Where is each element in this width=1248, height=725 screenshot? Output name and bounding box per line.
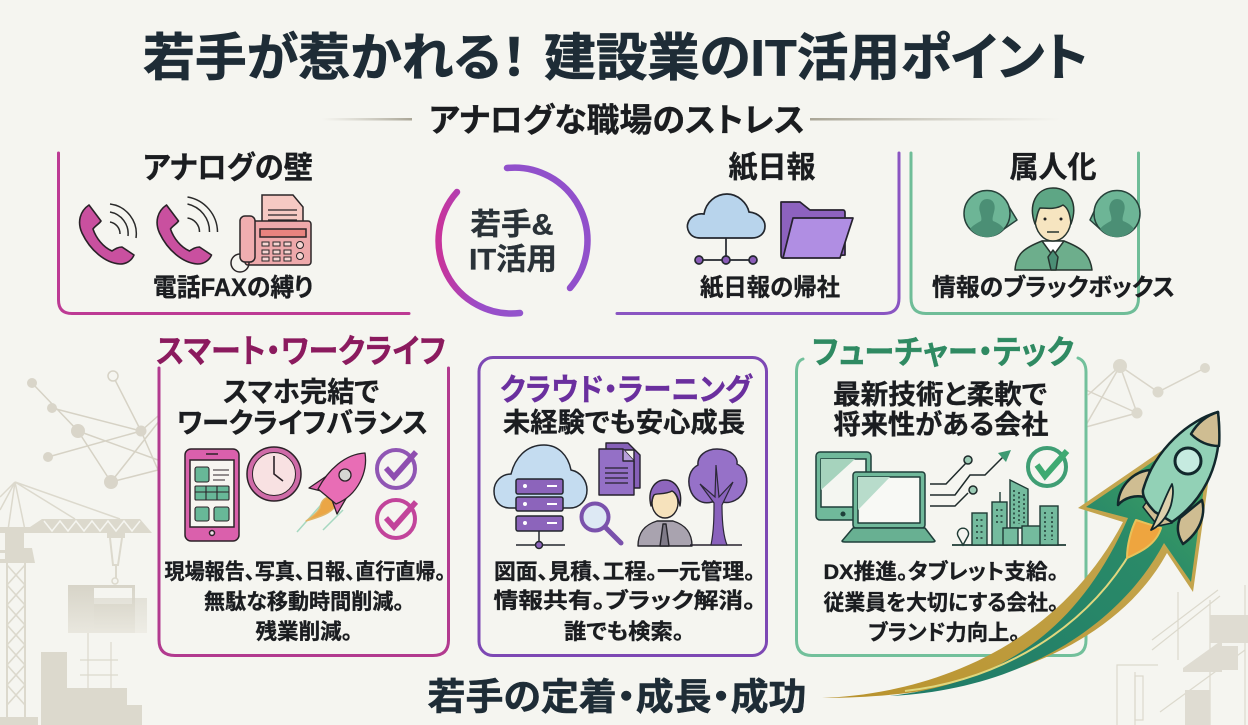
icon: cloud server — [494, 445, 587, 548]
panel: smart work life — [156, 332, 448, 656]
icon: purple check — [377, 450, 416, 488]
icon: folder — [781, 202, 853, 258]
section heading: analog workplace stress: アナログな職場のストレス — [429, 102, 805, 138]
heading: future tech: フューチャー・テック — [812, 334, 1074, 370]
subheading: safe growth: 未経験でも安心成長 — [503, 408, 745, 438]
label: returning to office: 紙日報の帰社 — [700, 274, 840, 302]
panel: knowledge silo — [911, 152, 1175, 314]
icon: fax machine — [231, 195, 311, 272]
title: 建設業のIT活用ポイント — [544, 30, 1088, 86]
icon: cloud network — [687, 194, 765, 264]
title: 若手が惹かれる！ — [143, 30, 527, 86]
body text: DX推進。タブレット支給。 — [824, 559, 1058, 584]
icon: laptop — [842, 472, 935, 542]
central ring: youth and IT — [439, 168, 587, 313]
body text: 現場報告、写真、日報、直行直帰。 — [164, 560, 446, 584]
label: phone and fax: 電話FAXの縛り — [153, 274, 313, 302]
icon: green check — [1028, 448, 1067, 486]
panel: analog wall — [58, 150, 409, 314]
panel: smart work life: 無駄な移動時間削減。 — [204, 590, 404, 614]
subheading: modern and flexible: 最新技術と柔軟で — [833, 380, 1047, 410]
icon: rocket — [297, 453, 366, 532]
panel: future tech: ブランド力向上。 — [868, 620, 1020, 645]
panel: cloud learning — [479, 358, 766, 656]
icon: businessman — [1015, 188, 1092, 270]
icon: clock — [247, 447, 301, 501]
icon: tablet — [816, 452, 871, 520]
panel: future tech — [796, 334, 1086, 656]
central ring: youth and IT: 若手& — [470, 208, 554, 242]
growth arrow with rocket — [822, 412, 1219, 698]
panel: future tech: 従業員を大切にする会社。 — [824, 591, 1058, 615]
background: network right — [1086, 359, 1210, 427]
icon: telephone 2 — [157, 197, 218, 264]
icon: large rocket — [1118, 412, 1219, 558]
icon: young worker — [638, 480, 692, 546]
heading: silo: 属人化 — [1010, 152, 1096, 184]
panel: paper daily report — [617, 152, 899, 314]
footer heading: 若手の定着・成長・成功 — [428, 676, 806, 718]
icon: city skyline — [952, 480, 1066, 545]
panel: future tech: 将来性がある会社 — [834, 409, 1048, 440]
icon: circuit growth arrow — [930, 450, 1011, 506]
panel: cloud learning: 誰でも検索。 — [564, 620, 684, 644]
icon: magnifying glass — [582, 504, 621, 543]
heading: analog wall: アナログの壁 — [143, 150, 313, 186]
background: tower crane — [0, 482, 152, 725]
panel: smart work life: 残業削減。 — [256, 620, 352, 644]
heading: smart work life: スマート・ワークライフ — [156, 332, 446, 370]
icon: growing tree — [689, 449, 747, 545]
icon: smartphone — [185, 449, 239, 541]
background: network left — [27, 371, 160, 489]
heading: paper report: 紙日報 — [728, 152, 816, 184]
label: information black box: 情報のブラックボックス — [932, 274, 1175, 302]
icon: telephone 1 — [80, 204, 136, 264]
central ring: youth and IT: IT活用 — [469, 244, 557, 276]
arrow — [822, 412, 1218, 698]
icon: left speech bubble — [964, 190, 1017, 237]
icon: magenta check — [377, 500, 416, 538]
body text: 図面、見積、工程。一元管理。 — [494, 560, 755, 584]
title — [143, 30, 1088, 86]
heading: cloud learning: クラウド・ラーニング — [500, 372, 753, 408]
panel: cloud learning: 情報共有。ブラック解消。 — [494, 588, 756, 613]
icon: documents — [599, 443, 640, 495]
subheading: work life balance: スマホ完結で — [223, 376, 379, 408]
panel: smart work life: ワークライフバランス — [177, 408, 428, 438]
background: building right — [1117, 585, 1248, 725]
icon: right speech bubble — [1090, 190, 1140, 237]
